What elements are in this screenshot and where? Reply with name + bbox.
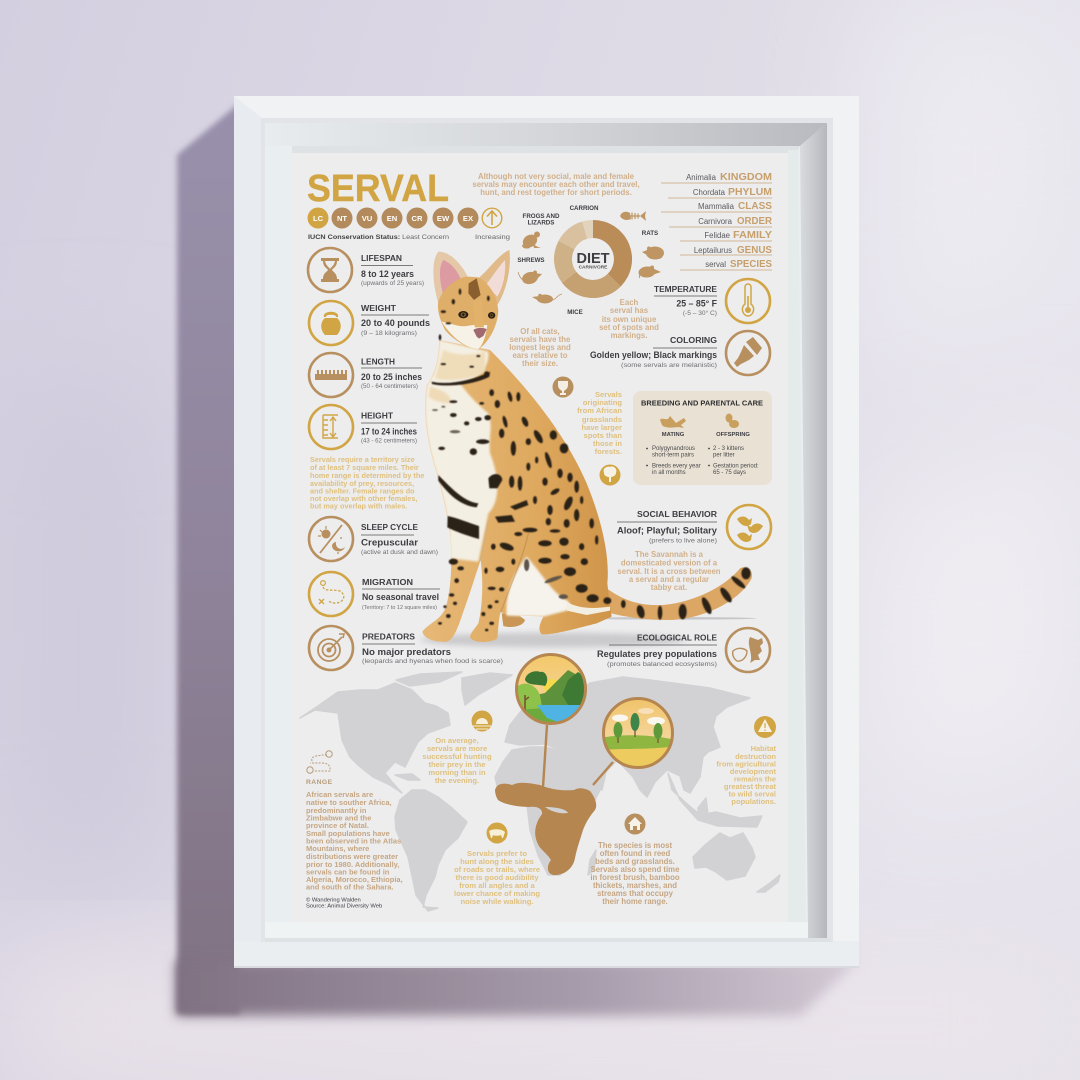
taxonomy list: GENUS xyxy=(737,244,772,256)
panel: breeding and parental care: short-term pairs xyxy=(652,452,694,458)
habitat note: The species is most xyxy=(598,841,672,850)
icon: mouse xyxy=(532,294,562,304)
threat note xyxy=(716,744,776,806)
habitat note: thickets, marshes, and xyxy=(593,881,677,890)
territory note: but may overlap with males. xyxy=(310,502,407,510)
habitat note: Servals also spend time xyxy=(591,865,680,874)
panel: breeding and parental care: in all months xyxy=(652,470,686,476)
range paragraph: servals can be found in xyxy=(306,868,390,876)
range paragraph: distributions were greater xyxy=(306,852,398,861)
stat: social behavior: SOCIAL BEHAVIOR xyxy=(637,509,718,519)
conservation status scale: Increasing xyxy=(475,234,510,241)
icon: carrion fish skeleton xyxy=(620,211,646,221)
stat: weight: (9 – 18 kilograms) xyxy=(361,330,417,337)
taxonomy list xyxy=(661,171,772,270)
range paragraph: Small populations have xyxy=(306,829,390,838)
stat: temperature: 25 – 85° F xyxy=(676,298,718,308)
spots note: serval has xyxy=(610,306,649,315)
territory note xyxy=(310,455,424,510)
stat: sleep cycle: Crepuscular xyxy=(361,538,419,548)
hunting time note: On average, xyxy=(435,736,479,745)
threat note: populations. xyxy=(731,797,776,806)
stat: coloring: COLORING xyxy=(670,335,717,345)
title: SERVAL xyxy=(307,168,449,210)
taxonomy list: ORDER xyxy=(737,215,772,227)
conservation status scale: EX xyxy=(463,214,473,223)
stat: migration: MIGRATION xyxy=(362,577,413,587)
taxonomy list: Leptailurus xyxy=(694,246,732,255)
taxonomy list: KINGDOM xyxy=(720,171,772,183)
stat: weight: WEIGHT xyxy=(361,303,397,313)
diet donut chart: DIET xyxy=(576,251,610,267)
stat: height: HEIGHT xyxy=(361,410,394,420)
taxonomy list: FAMILY xyxy=(733,229,772,241)
taxonomy list: serval xyxy=(705,260,726,269)
stat: sleep cycle xyxy=(309,517,438,561)
legs and ears note: ears relative to xyxy=(512,351,568,360)
stat: sleep cycle: SLEEP CYCLE xyxy=(361,522,418,532)
range paragraph: Algeria, Morocco, Ethiopia, xyxy=(306,875,403,884)
grassland spots note: have larger xyxy=(581,423,622,432)
stat: lifespan: 8 to 12 years xyxy=(361,269,414,279)
icon: frog xyxy=(521,232,541,250)
stat: lifespan: LIFESPAN xyxy=(361,253,402,263)
taxonomy list: Carnivora xyxy=(698,217,733,226)
taxonomy list: Animalia xyxy=(686,173,717,182)
range heading: RANGE xyxy=(306,779,333,786)
icon: home xyxy=(624,814,646,834)
range paragraph: Zimbabwe and the xyxy=(306,814,371,822)
habitat note xyxy=(590,841,680,906)
territory note: Servals require a territory size xyxy=(310,455,415,464)
panel: breeding and parental care: MATING xyxy=(662,432,685,438)
stat: height xyxy=(309,405,417,449)
savannah note xyxy=(617,550,721,592)
legs and ears note xyxy=(509,327,571,368)
stat: migration xyxy=(309,572,440,616)
stat: ecological role: Regulates prey populations xyxy=(597,649,717,659)
stat: weight: 20 to 40 pounds xyxy=(361,318,430,328)
credits: © Wandering Walden xyxy=(306,896,361,904)
hunting time note: the evening. xyxy=(435,776,479,785)
stat: social behavior: Aloof; Playful; Solitary xyxy=(617,526,717,536)
panel: breeding and parental care xyxy=(633,391,772,485)
diet labels xyxy=(517,205,658,316)
taxonomy list: Mammalia xyxy=(698,202,735,211)
diet labels: FROGS AND xyxy=(523,213,560,220)
savannah note: a serval and a regular xyxy=(629,575,709,584)
stat: coloring: Golden yellow; Black markings xyxy=(590,350,717,360)
stat: length: 20 to 25 inches xyxy=(361,372,422,382)
stat: height: (43 - 62 centimeters) xyxy=(361,438,417,444)
stat: social behavior xyxy=(617,505,771,549)
panel: breeding and parental care: 65 - 75 days xyxy=(713,470,746,476)
stat: coloring: (some servals are melanistic) xyxy=(621,362,717,369)
panel: breeding and parental care: Breeds every year xyxy=(652,464,701,470)
diet labels: LIZARDS xyxy=(528,220,554,226)
diet labels: MICE xyxy=(567,309,583,316)
panel: breeding and parental care: 2 - 3 kittens xyxy=(713,446,744,452)
territory note: of at least 7 square miles. Their xyxy=(310,463,419,472)
panel: breeding and parental care: OFFSPRING xyxy=(716,432,750,438)
hunting time note xyxy=(422,736,492,785)
stat: predators: (leopards and hyenas when food is scarce) xyxy=(362,658,503,665)
roadside hunting note: from all angles and a xyxy=(459,881,536,890)
savannah note: tabby cat. xyxy=(651,583,687,592)
habitat note: streams that occupy xyxy=(597,889,674,898)
conservation status scale: LC xyxy=(313,214,324,223)
stat: lifespan xyxy=(308,248,424,292)
range paragraph: African servals are xyxy=(306,790,373,799)
white picture frame xyxy=(234,96,859,968)
threat note: greatest threat xyxy=(724,782,776,791)
grassland spots note: originating xyxy=(583,398,622,407)
conservation status scale: VU xyxy=(362,214,373,223)
roadside hunting note: lower chance of making xyxy=(454,889,540,898)
roadside hunting note: of roads or trails, where xyxy=(454,865,540,874)
taxonomy list: SPECIES xyxy=(730,258,772,270)
diet donut chart: CARNIVORE xyxy=(579,264,608,270)
panel: breeding and parental care: Gestation period: xyxy=(713,464,759,470)
taxonomy list: CLASS xyxy=(738,200,772,212)
stat: temperature: TEMPERATURE xyxy=(654,284,717,294)
habitat note: their home range. xyxy=(602,897,668,906)
icon: warning xyxy=(754,716,776,738)
conservation status scale: EN xyxy=(387,214,397,223)
threat note: development xyxy=(730,767,776,776)
africa range and pointer lines xyxy=(495,725,613,875)
spots note: its own unique xyxy=(602,315,657,324)
range paragraph: been observed in the Atlas xyxy=(306,836,401,846)
taxonomy list: Felidae xyxy=(704,231,730,240)
range paragraph: province of Natal. xyxy=(306,821,369,830)
conservation status scale: NT xyxy=(337,214,347,223)
icon: shrew xyxy=(518,270,542,286)
stat: ecological role xyxy=(597,628,770,672)
habitat note: in forest brush, bamboo xyxy=(590,873,680,882)
landscape circle: grassland trees xyxy=(602,697,674,769)
spots note xyxy=(599,298,659,340)
world map xyxy=(300,672,780,911)
savannah note: The Savannah is a xyxy=(635,550,704,559)
diet labels: RATS xyxy=(642,230,658,237)
territory note: availability of prey, resources, xyxy=(310,479,414,488)
roadside hunting note: there is good audibility xyxy=(455,873,539,882)
icon: trophy xyxy=(552,376,574,398)
icon: rat xyxy=(642,246,664,260)
threat note: remains the xyxy=(734,774,776,784)
icon: tree xyxy=(600,464,620,486)
range paragraph: predominantly in xyxy=(306,806,367,815)
stat: length: (50 - 64 centimeters) xyxy=(361,383,418,390)
icon: sunrise xyxy=(472,710,492,732)
stat: predators: No major predators xyxy=(362,647,451,657)
intro text xyxy=(472,172,640,197)
threat note: Habitat xyxy=(751,744,776,753)
grassland spots note: Servals xyxy=(595,390,622,399)
stat: temperature xyxy=(654,279,770,323)
diet labels: SHREWS xyxy=(517,257,545,264)
stat: weight xyxy=(309,301,430,345)
poster paper xyxy=(292,153,788,922)
intro text: Although not very social, male and female xyxy=(478,172,635,181)
range paragraph: prior to 1980. Additionally, xyxy=(306,860,399,869)
hunting time note: their prey in the xyxy=(429,760,485,769)
conservation status scale: CR xyxy=(412,214,423,223)
range paragraph xyxy=(306,790,403,892)
diet donut chart xyxy=(554,220,632,298)
stat: predators: PREDATORS xyxy=(362,632,415,642)
stat: migration: (Territory: 7 to 12 square miles) xyxy=(362,605,437,611)
taxonomy list: Chordata xyxy=(693,188,726,197)
legs and ears note: servals have the xyxy=(510,335,571,344)
intro text: servals may encounter each other and travel, xyxy=(472,180,640,189)
cat photo xyxy=(420,250,757,647)
stat: length: LENGTH xyxy=(361,356,395,366)
stat: ecological role: ECOLOGICAL ROLE xyxy=(637,632,717,642)
territory note: and shelter. Female ranges do xyxy=(310,486,415,496)
grassland spots note: grasslands xyxy=(582,415,622,424)
grassland spots note: forests. xyxy=(595,447,622,456)
range paragraph: and south of the Sahara. xyxy=(306,882,394,892)
icon: rat two xyxy=(638,266,661,278)
habitat note: beds and grasslands. xyxy=(595,857,675,866)
legs and ears note: their size. xyxy=(522,359,558,368)
threat note: to wild serval xyxy=(728,790,776,798)
stat: social behavior: (prefers to live alone) xyxy=(649,538,717,544)
intro text: hunt, and rest together for short periods. xyxy=(480,188,632,197)
conservation status scale: EW xyxy=(437,214,450,223)
diet labels: CARRION xyxy=(570,205,599,212)
grassland spots note: from African xyxy=(577,406,622,415)
territory note: home range is determined by the xyxy=(310,471,424,480)
credits xyxy=(306,896,382,910)
stat: lifespan: (upwards of 25 years) xyxy=(361,280,424,287)
frame shadow xyxy=(176,104,858,1016)
conservation status scale: IUCN Conservation Status: Least Concern xyxy=(308,234,449,241)
icon: range route xyxy=(307,751,332,773)
roadside hunting note: Servals prefer to xyxy=(467,849,527,858)
panel: breeding and parental care: per litter xyxy=(713,452,735,458)
stat: coloring xyxy=(590,331,770,375)
grassland spots note xyxy=(577,390,622,456)
credits: Source: Animal Diversity Web xyxy=(306,904,382,910)
hunting time note: servals are more xyxy=(427,744,487,753)
panel: breeding and parental care: BREEDING AND PARENTAL CARE xyxy=(641,398,763,408)
threat note: destruction xyxy=(735,752,776,761)
grassland spots note: spots than xyxy=(584,431,622,440)
savannah note: domesticated version of a xyxy=(621,558,718,568)
landscape circle: savanna lake xyxy=(515,653,590,725)
panel: breeding and parental care: Polygynandrous xyxy=(652,446,695,452)
roadside hunting note: noise while walking. xyxy=(460,897,534,906)
territory note: not overlap with other females, xyxy=(310,494,417,503)
roadside hunting note: hunt along the sides xyxy=(460,857,534,866)
spots note: markings. xyxy=(611,331,647,340)
stat: predators xyxy=(309,626,503,670)
stat: sleep cycle: (active at dusk and dawn) xyxy=(361,549,438,556)
grassland spots note: those in xyxy=(593,439,622,448)
savannah note: serval. It is a cross between xyxy=(617,567,721,576)
range paragraph: Mountains, where xyxy=(306,844,369,853)
taxonomy list: PHYLUM xyxy=(728,186,772,198)
legs and ears note: Of all cats, xyxy=(520,327,560,336)
range paragraph: native to souther Africa, xyxy=(306,798,392,807)
legs and ears note: longest legs and xyxy=(509,343,571,352)
threat note: from agricultural xyxy=(716,760,776,768)
stat: length xyxy=(309,353,422,397)
icon: walking serval xyxy=(486,822,508,844)
stat: ecological role: (promotes balanced ecosystems) xyxy=(607,661,717,668)
stat: migration: No seasonal travel xyxy=(362,592,439,602)
hunting time note: successful hunting xyxy=(422,752,492,761)
roadside hunting note xyxy=(454,849,540,906)
spots note: set of spots and xyxy=(599,323,659,332)
habitat note: often found in reed xyxy=(600,849,671,858)
stat: temperature: (-5 – 30° C) xyxy=(683,309,717,317)
conservation status scale xyxy=(308,208,510,241)
stat: height: 17 to 24 inches xyxy=(361,426,417,436)
spots note: Each xyxy=(620,298,639,307)
hunting time note: morning than in xyxy=(428,768,486,777)
